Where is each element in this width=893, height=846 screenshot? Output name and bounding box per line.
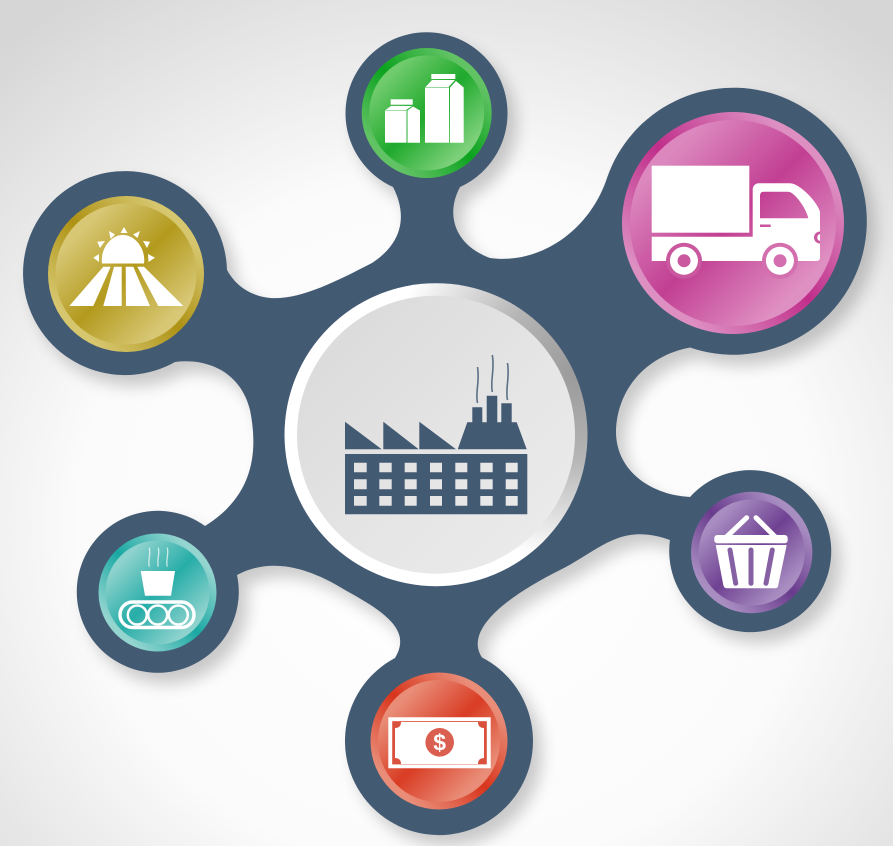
panel: central factory (284, 283, 588, 586)
dollar sign: $ (433, 730, 446, 756)
icon: shopping basket (714, 518, 788, 588)
headlight (814, 232, 820, 244)
icon: sun over field (69, 227, 183, 306)
panel: packaging (362, 48, 492, 178)
panel: production (98, 534, 216, 652)
icon: factory (345, 355, 527, 514)
panel: farming (48, 196, 204, 352)
icon: milk cartons (385, 74, 464, 143)
icon: conveyor (120, 548, 194, 628)
panel: retail (691, 492, 812, 613)
panel: money (370, 672, 508, 810)
panel: transport (622, 112, 844, 334)
icon: truck (652, 166, 820, 279)
